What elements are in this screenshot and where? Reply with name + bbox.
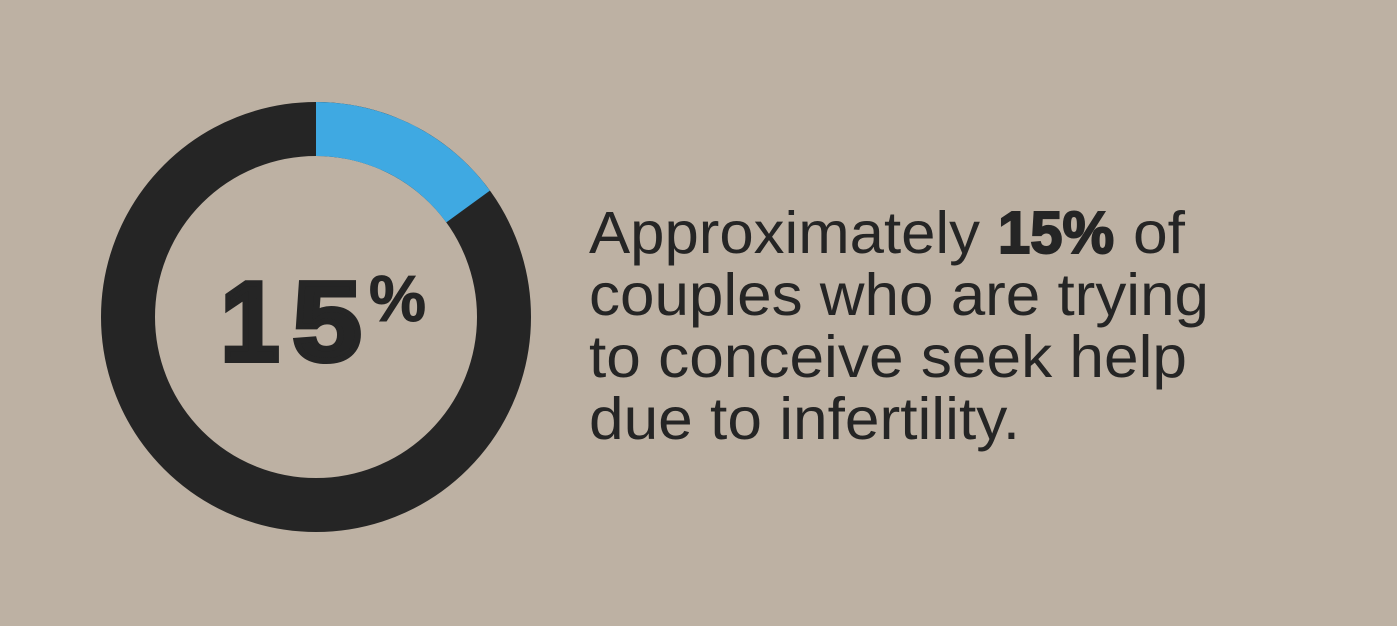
blue segment: 15 percent: [316, 102, 490, 222]
statement text: Approximately: [589, 200, 981, 266]
donut centre value: 1: [221, 260, 279, 384]
donut centre value: [221, 260, 426, 384]
statement text: to conceive seek help: [589, 324, 1187, 390]
donut centre value: %: [369, 262, 426, 335]
donut centre value: 5: [293, 260, 361, 384]
statement text: 15%: [998, 200, 1114, 266]
donut chart: 15 percent: [128, 102, 504, 505]
statement text: of: [1133, 200, 1186, 266]
statement text: [589, 200, 1209, 452]
statement text: due to infertility.: [589, 386, 1020, 452]
statement text: couples who are trying: [589, 262, 1209, 328]
